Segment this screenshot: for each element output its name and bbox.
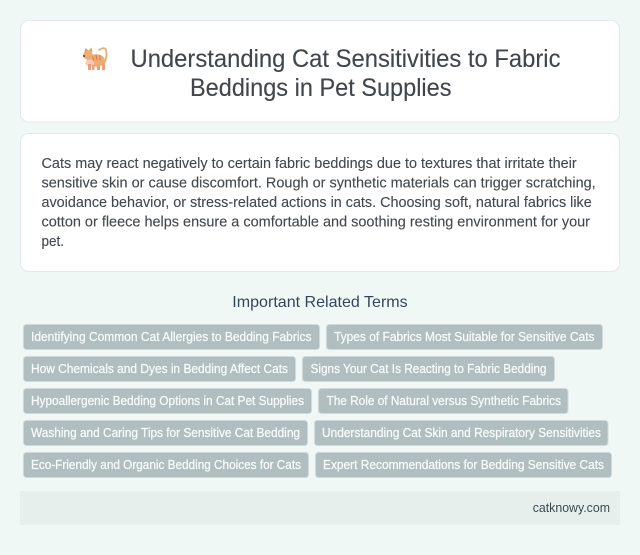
chip: Identifying Common Cat Allergies to Bedding Fabrics (31, 330, 312, 344)
description text: cotton or fleece helps ensure a comfortable and soothing resting environment for your (42, 214, 590, 230)
description text (42, 156, 596, 250)
chip (24, 420, 308, 446)
chip: Types of Fabrics Most Suitable for Sensitive Cats (334, 330, 594, 344)
title text (130, 45, 560, 102)
footer (20, 491, 620, 525)
chip: Signs Your Cat Is Reacting to Fabric Bedding (310, 362, 547, 376)
footer source text: catknowy.com (533, 500, 610, 515)
chip (302, 356, 554, 382)
chip: Hypoallergenic Bedding Options in Cat Pet Supplies (31, 394, 304, 408)
chip (318, 388, 568, 414)
chip (314, 420, 608, 446)
panel: title card (20, 20, 620, 122)
description text: sensitive skin or cause discomfort. Rough or synthetic materials can trigger scratching, (42, 176, 596, 192)
chip: Understanding Cat Skin and Respiratory Sensitivities (322, 426, 601, 440)
chip: How Chemicals and Dyes in Bedding Affect Cats (31, 362, 288, 376)
chip: Eco-Friendly and Organic Bedding Choices for Cats (31, 458, 301, 472)
description text: pet. (42, 234, 64, 250)
chip: The Role of Natural versus Synthetic Fabrics (326, 394, 561, 408)
heading: important related terms: Important Related Terms (232, 294, 408, 311)
description text: avoidance behavior, or stress-related actions in cats. Choosing soft, natural fabrics like (42, 195, 592, 211)
chip (24, 452, 308, 478)
panel: description card (20, 134, 620, 272)
chip (24, 388, 312, 414)
title text: Understanding Cat Sensitivities to Fabric (130, 45, 560, 73)
panel: related term chips (24, 324, 612, 478)
chip (316, 452, 612, 478)
chip: Expert Recommendations for Bedding Sensitive Cats (323, 458, 604, 472)
chip (24, 324, 320, 350)
description text: Cats may react negatively to certain fabric beddings due to textures that irritate their (42, 156, 577, 172)
icon: cat (83, 48, 106, 70)
title text: Beddings in Pet Supplies (190, 74, 452, 102)
chip (326, 324, 602, 350)
chip (24, 356, 296, 382)
chip: Washing and Caring Tips for Sensitive Cat Bedding (31, 426, 300, 440)
